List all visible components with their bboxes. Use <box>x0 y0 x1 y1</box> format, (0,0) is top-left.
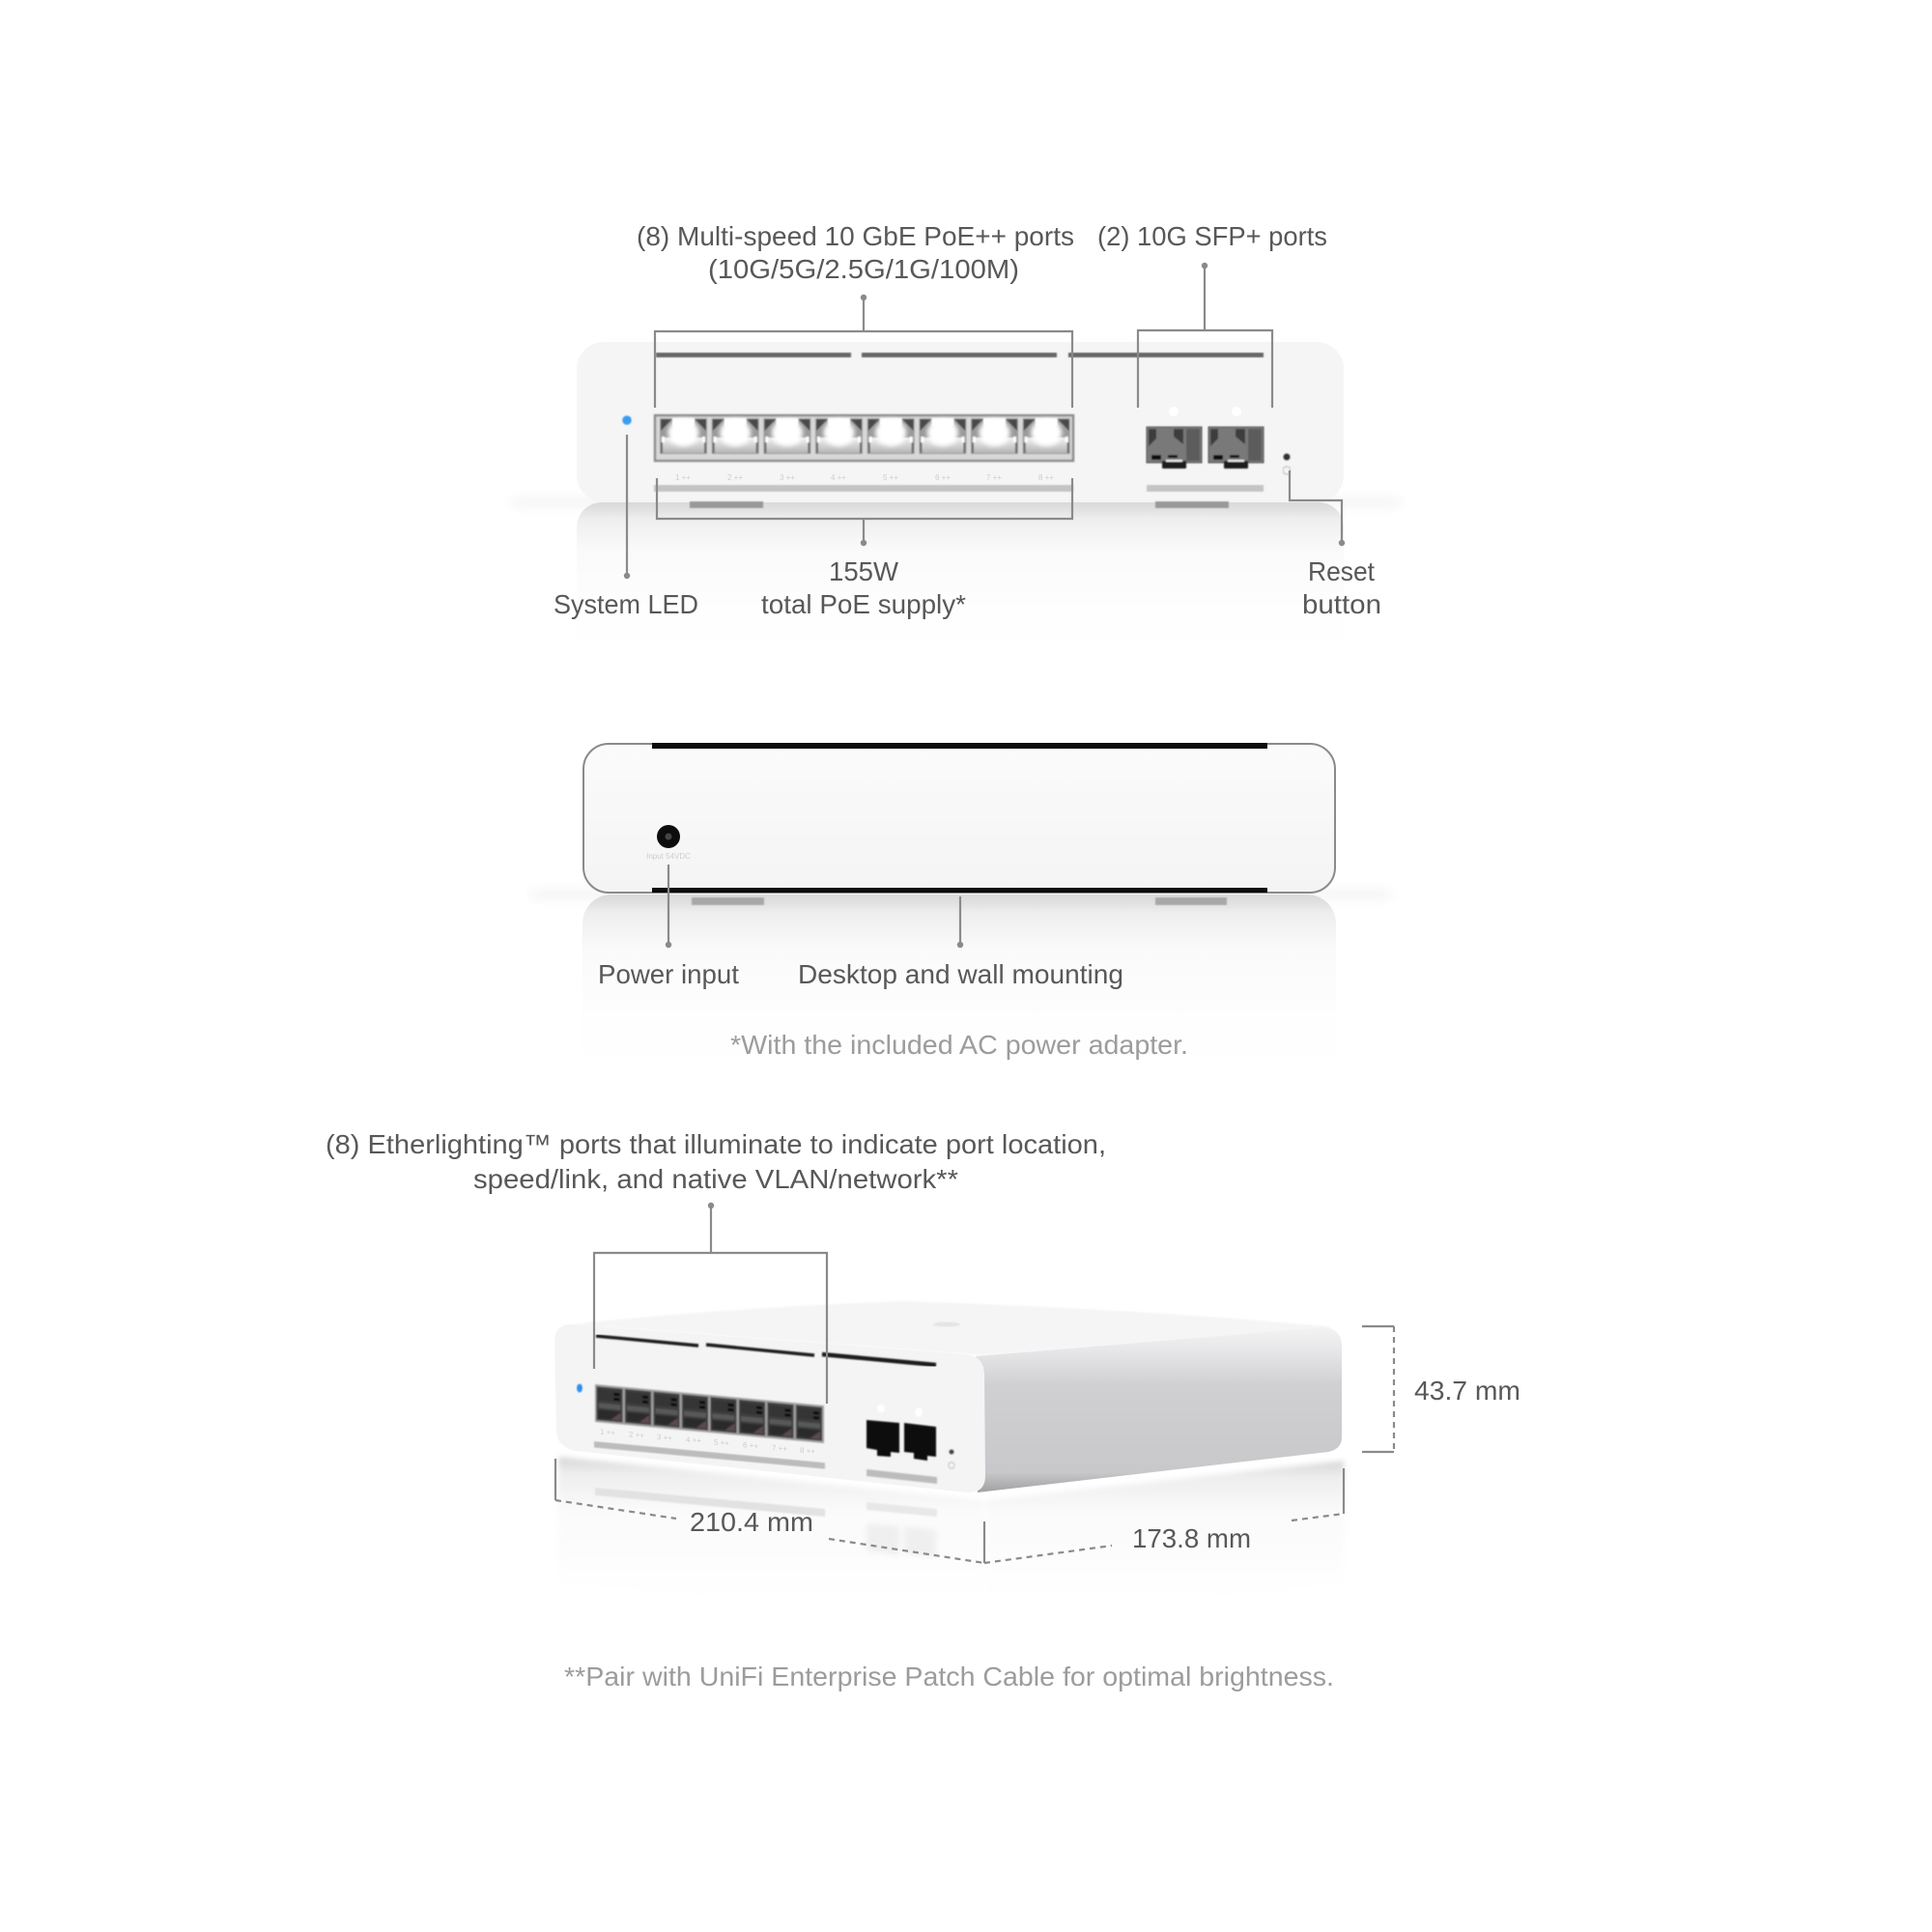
port labels and PoE bar: 8 ++ <box>800 1446 815 1456</box>
top vent <box>652 743 1267 749</box>
reflection under device <box>558 1457 1344 1633</box>
bracket: SFP ports <box>1138 263 1272 408</box>
rubber feet <box>690 501 1229 508</box>
port number labels: 3 ++ <box>780 473 795 482</box>
device rear face <box>583 744 1335 893</box>
leader: reset button <box>1290 470 1345 546</box>
port number labels <box>675 473 1054 482</box>
label: ethernet lighting <box>326 1129 1106 1194</box>
label: system LED: System LED <box>554 589 698 619</box>
dimension: depth <box>984 1468 1344 1563</box>
port number labels: 7 ++ <box>986 473 1002 482</box>
rubber feet <box>692 897 1227 905</box>
system LED <box>622 415 632 425</box>
SFP LEDs <box>877 1405 923 1416</box>
bracket: PoE supply <box>657 478 1072 546</box>
port labels and PoE bar: 6 ++ <box>743 1440 758 1451</box>
top vent slots <box>656 353 1264 357</box>
port number labels: 2 ++ <box>727 473 743 482</box>
port number labels: 8 ++ <box>1038 473 1054 482</box>
device front face <box>554 1324 985 1492</box>
port labels and PoE bar: 5 ++ <box>714 1438 729 1448</box>
brand logo <box>933 1321 960 1327</box>
eight Etherlighting ports <box>595 1384 824 1443</box>
label: height: 43.7 mm <box>1414 1376 1520 1406</box>
label: multi-speed ports: (10G/5G/2.5G/1G/100M) <box>708 254 1019 284</box>
reset button <box>1283 454 1291 474</box>
port labels and PoE bar: 7 ++ <box>772 1443 787 1454</box>
label: PoE supply: total PoE supply* <box>761 589 966 619</box>
SFP bar <box>1147 485 1264 492</box>
label: power input: Power input <box>598 959 739 989</box>
bracket: multi-speed ports <box>655 295 1072 408</box>
bottom vent <box>652 888 1267 893</box>
footnote: patch cable: **Pair with UniFi Enterprise Patch Cable for optimal brightness. <box>564 1662 1334 1691</box>
SFP bar <box>867 1469 937 1484</box>
PoE bar <box>654 485 1073 492</box>
eight RJ45 ports <box>655 415 1073 461</box>
dimension: width <box>555 1459 984 1563</box>
port labels and PoE bar: 4 ++ <box>686 1435 701 1445</box>
label: PoE supply: 155W <box>829 556 899 586</box>
port number labels: 1 ++ <box>675 473 691 482</box>
label: mounting: Desktop and wall mounting <box>798 959 1123 989</box>
dimension: height <box>1362 1326 1394 1452</box>
label: SFP ports: (2) 10G SFP+ ports <box>1097 221 1327 251</box>
front vent slots <box>596 1336 936 1365</box>
label: ethernet lighting: (8) Etherlighting™ ports that illuminate to indicate port location, <box>326 1129 1106 1159</box>
device side face <box>976 1327 1342 1492</box>
label: ethernet lighting: speed/link, and native VLAN/network** <box>473 1164 958 1194</box>
label: reset button: Reset <box>1308 556 1375 586</box>
device front face <box>577 342 1344 502</box>
SFP status LEDs <box>1169 407 1241 416</box>
panel: perspective view with dimensions <box>326 1129 1520 1691</box>
SFP ports <box>867 1420 936 1461</box>
reset button <box>949 1449 954 1468</box>
leader: mounting <box>957 896 963 948</box>
port labels and PoE bar: 2 ++ <box>629 1430 644 1440</box>
leader: system LED <box>624 435 630 579</box>
device top surface <box>570 1301 1331 1355</box>
footnote: AC adapter: *With the included AC power adapter. <box>730 1030 1188 1060</box>
reflection under rear view <box>531 893 1391 1078</box>
reflection under front view <box>512 500 1401 662</box>
panel: front view of switch <box>512 221 1401 662</box>
label: width: 210.4 mm <box>690 1507 813 1537</box>
power jack <box>657 825 680 848</box>
port number labels: 6 ++ <box>935 473 951 482</box>
SFP+ ports <box>1147 427 1264 469</box>
leader: power input <box>666 865 671 948</box>
label: depth: 173.8 mm <box>1132 1523 1251 1553</box>
port number labels: 4 ++ <box>831 473 846 482</box>
label: multi-speed ports <box>637 221 1074 284</box>
panel: rear view of switch <box>531 743 1391 1078</box>
port labels and PoE bar <box>594 1427 825 1469</box>
bracket: Etherlighting ports <box>594 1203 827 1404</box>
label: multi-speed ports: (8) Multi-speed 10 GbE PoE++ ports <box>637 221 1074 251</box>
port labels and PoE bar: 1 ++ <box>600 1428 615 1437</box>
label: reset button: button <box>1302 589 1381 619</box>
label: PoE supply <box>761 556 966 619</box>
port number labels: 5 ++ <box>883 473 898 482</box>
power jack caption: Input 54VDC <box>646 852 691 861</box>
port labels and PoE bar: 3 ++ <box>657 1433 672 1443</box>
label: reset button <box>1302 556 1381 619</box>
system LED <box>577 1383 582 1393</box>
